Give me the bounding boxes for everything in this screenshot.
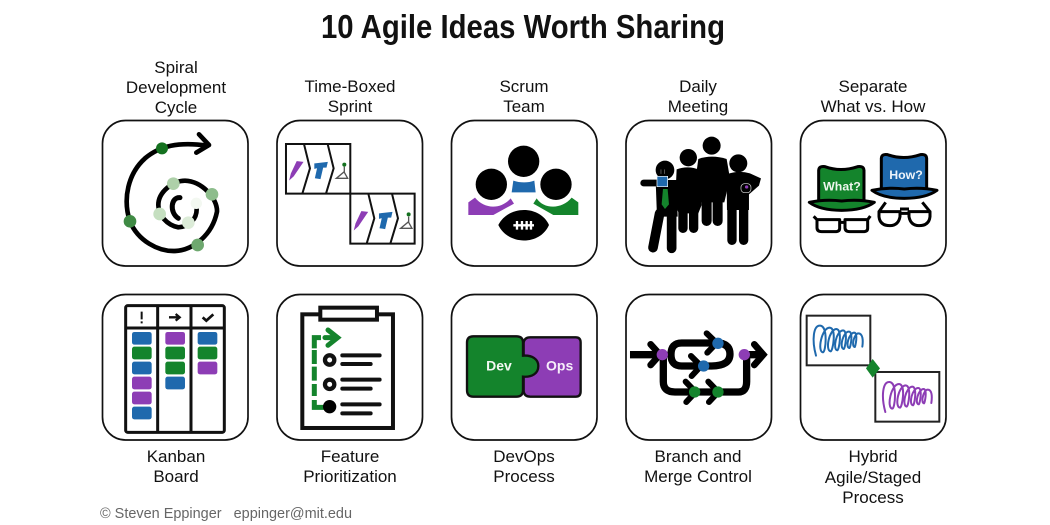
heading: hybrid: Hybrid [848,447,898,466]
heading: what vs how: What vs. How [821,97,926,116]
card: sprint [277,120,422,266]
icon: kanban board [126,306,224,432]
icon: dev ops puzzle [467,336,581,397]
title: 10 Agile Ideas Worth Sharing [321,8,725,45]
card: hybrid [800,294,946,440]
heading: meeting: Daily [679,77,717,96]
card: feature [277,294,422,440]
icon: two hats and glasses [809,154,937,232]
heading: feature: Feature [321,447,379,466]
heading: sprint: Sprint [328,97,372,116]
heading: hybrid: Agile/Staged [825,468,921,487]
heading: spiral: Cycle [155,98,197,117]
icon: dev ops puzzle: Ops [546,358,573,374]
heading: branch: Merge Control [644,467,752,486]
heading: what vs how: Separate [838,77,908,96]
heading: scrum: Scrum [499,77,549,96]
card: kanban [102,294,248,440]
icon: two hats and glasses: What? [823,179,861,193]
icon: dev ops puzzle: Dev [486,358,512,374]
heading: kanban: Board [153,467,199,486]
icon: branch merge flow [630,333,763,402]
card: devops [452,294,597,440]
icon: spiral arrow [124,134,218,251]
panel: feature prioritization [277,294,422,486]
heading: spiral: Spiral [154,58,198,77]
heading: devops: Process [493,467,555,486]
heading: scrum: Team [503,97,545,116]
icon: hybrid stages with coils [807,316,939,422]
icon: standing people [644,137,761,248]
card: what vs how [800,120,946,266]
panel: devops process [452,294,597,486]
panel: daily meeting [626,77,772,266]
panel: kanban board [102,294,248,486]
panel: scrum team [452,77,597,266]
card: branch [626,294,772,440]
panel: separate what vs how [800,77,946,266]
heading: devops: DevOps [493,447,555,466]
icon: two hats and glasses: How? [889,168,923,182]
icon: scrum team with football [468,146,578,240]
heading: sprint: Time-Boxed [304,77,396,96]
card: meeting [626,120,772,266]
card: scrum [452,120,597,266]
card: spiral [102,120,248,266]
icon: sprint chevrons [286,144,415,244]
heading: hybrid: Process [842,488,904,507]
icon: clipboard list [302,308,393,428]
footer credit: © Steven Eppinger eppinger@mit.edu [100,505,352,522]
panel: spiral development cycle [102,58,248,266]
panel: time-boxed sprint [277,77,422,266]
heading: meeting: Meeting [668,97,728,116]
heading: kanban: Kanban [147,447,205,466]
heading: branch: Branch and [655,447,741,466]
heading: feature: Prioritization [303,467,397,486]
panel: hybrid agile staged process [800,294,946,507]
heading: spiral: Development [126,78,226,97]
panel: branch and merge control [626,294,772,486]
